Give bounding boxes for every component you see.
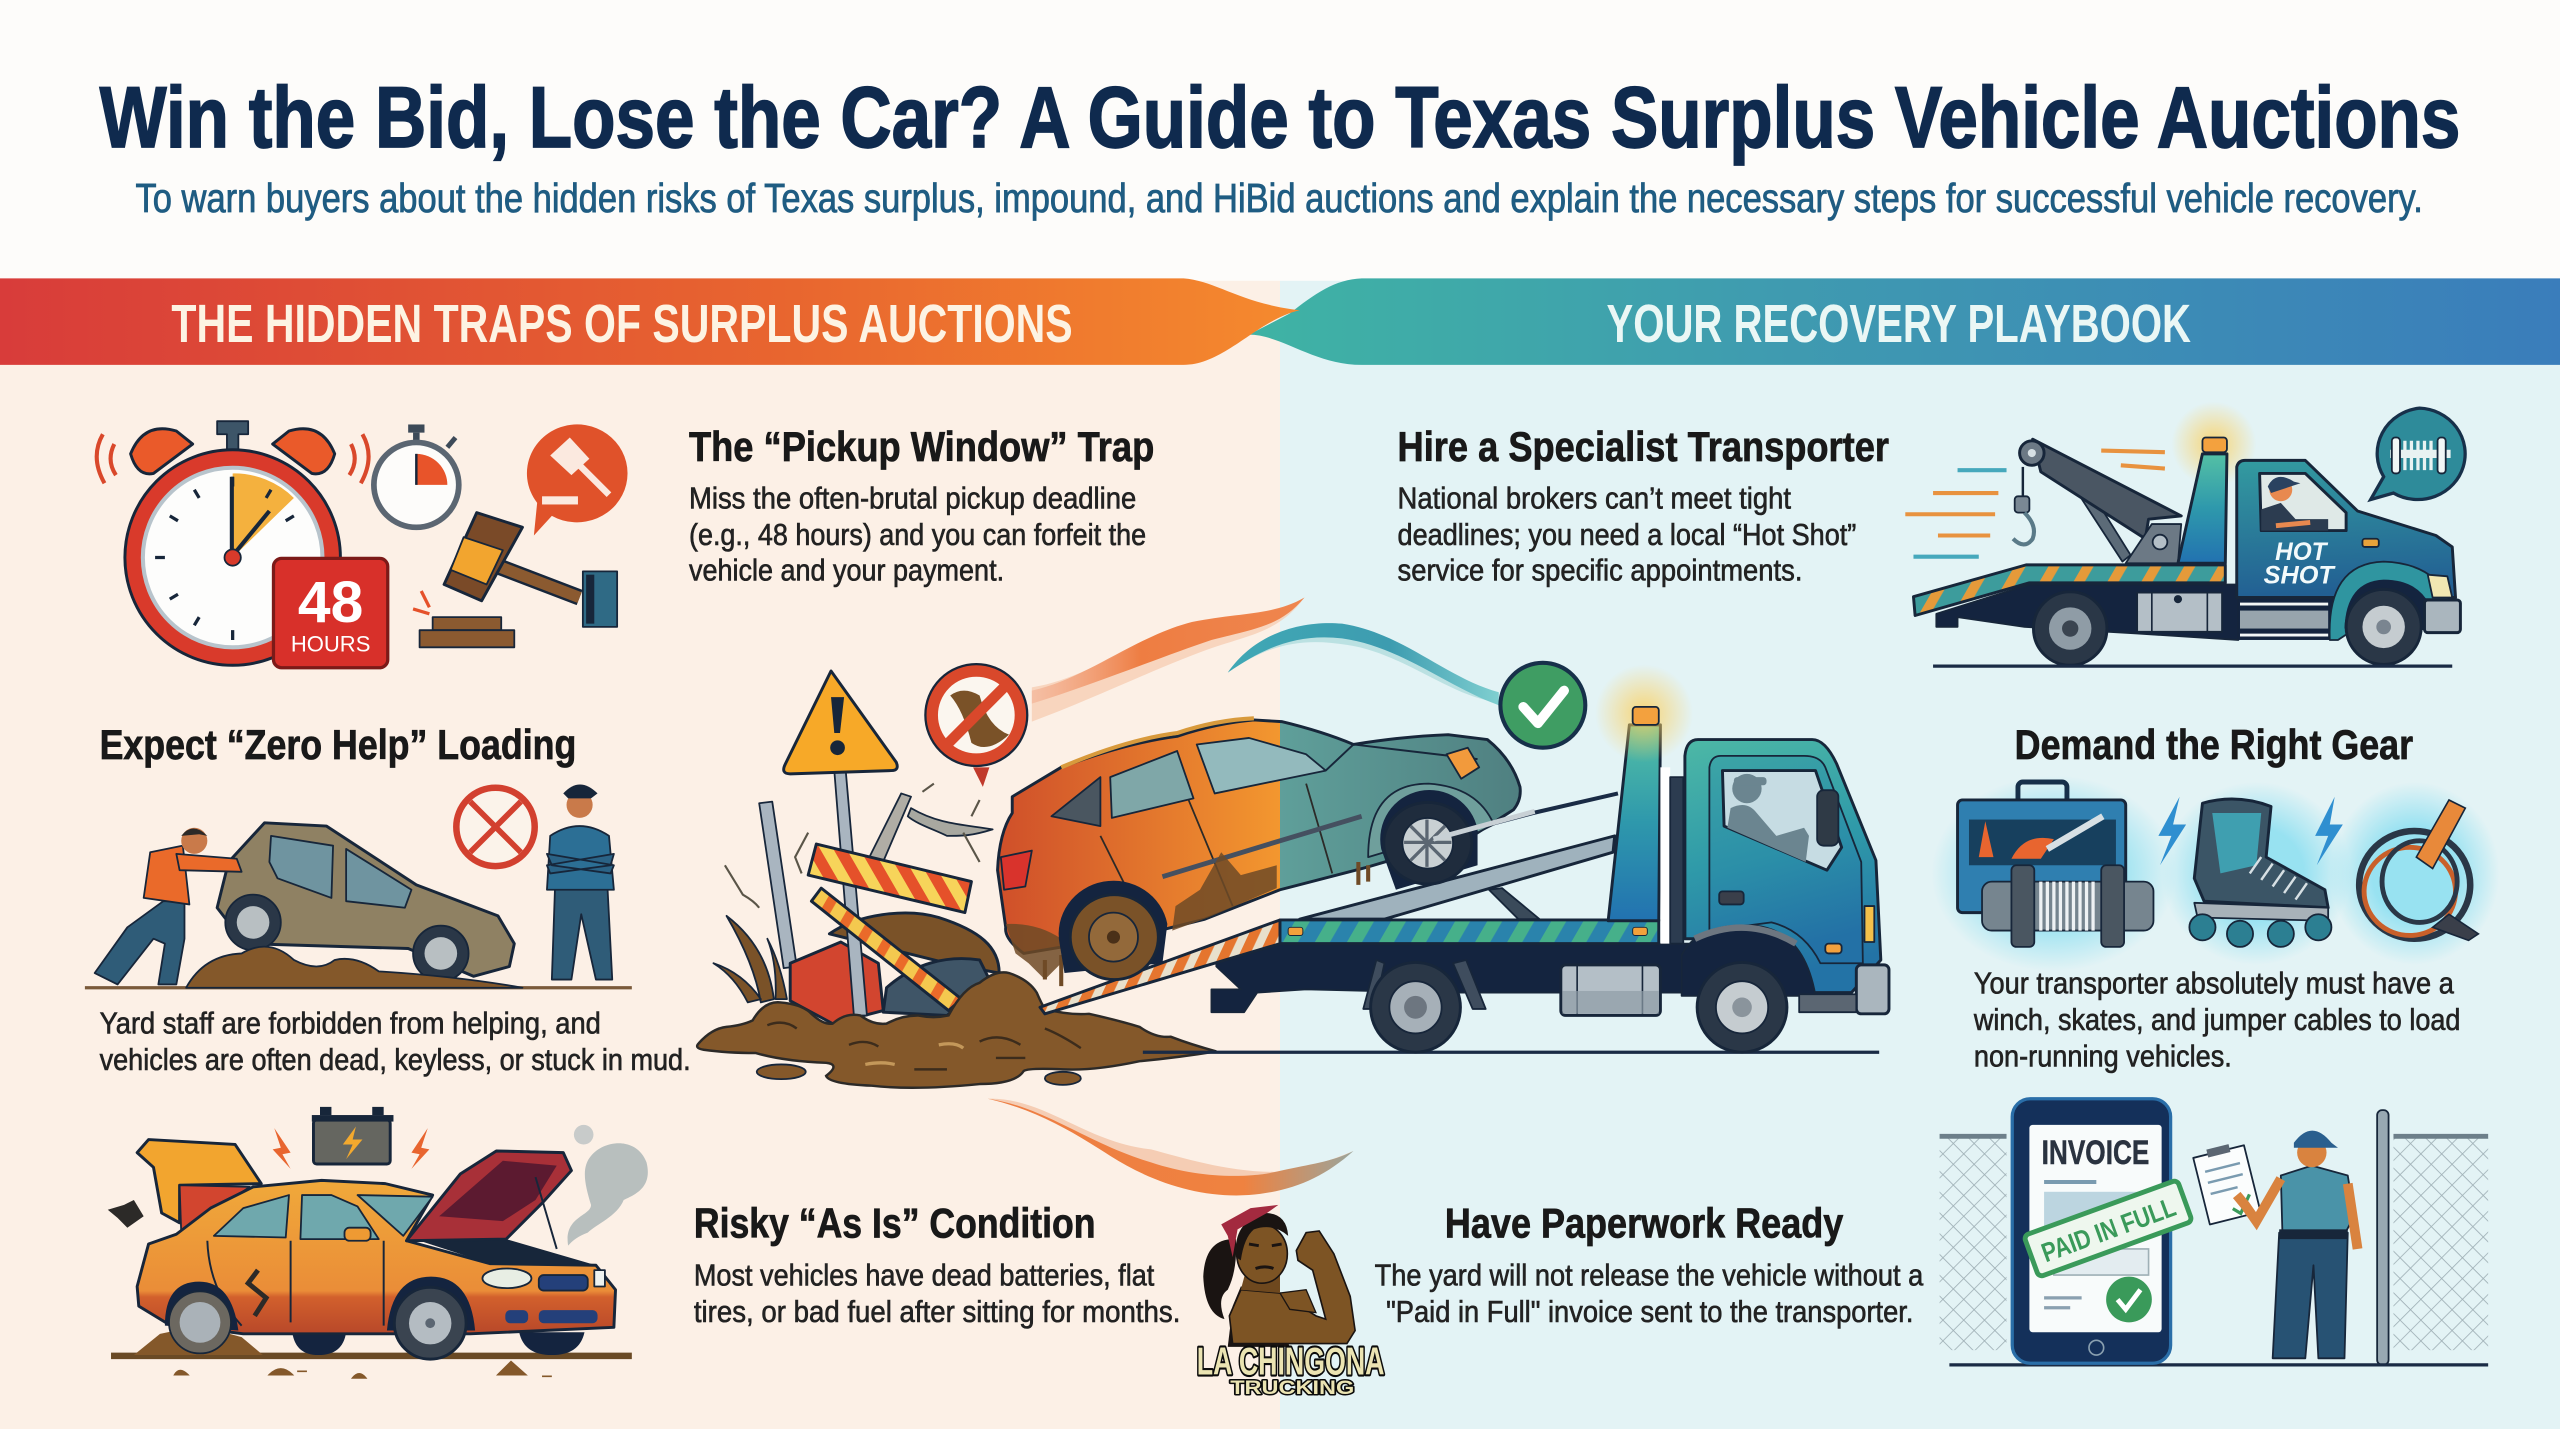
rear truck wheel: [1371, 962, 1460, 1052]
driver: [2261, 477, 2328, 531]
driver: [1727, 774, 1809, 862]
clock face: [143, 468, 322, 647]
rear wheel arch: [1059, 881, 1167, 973]
gavel speech bubble: [527, 424, 628, 535]
fenders: [1363, 960, 1486, 1009]
front fender: [1368, 784, 1494, 857]
car body: [137, 1180, 616, 1334]
text block: as is: [694, 1199, 1180, 1329]
ground: [111, 1354, 632, 1358]
sparks: [273, 1128, 429, 1169]
front truck wheel: [1697, 962, 1787, 1052]
sound arcs: [97, 434, 369, 483]
swoosh arrow: orange upper: [1032, 598, 1304, 722]
dirt rocks: [175, 1362, 552, 1378]
text block: as is: tires, or bad fuel after sitting for months.: [694, 1296, 1180, 1329]
skate: [2189, 799, 2331, 947]
deck: [1913, 565, 2225, 615]
dead branch: [725, 784, 993, 908]
headlight: [1447, 748, 1479, 779]
bumper: [1799, 965, 1889, 1014]
illustration: invoice and yard gate: [1940, 1099, 2488, 1365]
text block: specialist transporter: [1398, 423, 1889, 588]
taillight: [1001, 851, 1032, 890]
hood open: [407, 1151, 571, 1241]
banner: recovery playbook: [1249, 278, 2560, 365]
support arm: [1489, 888, 1540, 919]
tow hook: [1433, 811, 1535, 839]
wordmark: [1197, 1341, 1384, 1399]
door seams: [1100, 784, 1332, 931]
text block: specialist transporter: National brokers can’t meet tight: [1398, 483, 1792, 516]
speed lines: [1905, 451, 2165, 557]
window: [2260, 473, 2346, 531]
roof edge: [1061, 718, 1254, 767]
icon group: alarm clock 48 hours: [97, 421, 628, 668]
headlight and grille: [482, 1269, 605, 1323]
neck and head: [1241, 1265, 1280, 1293]
door panel: [1709, 756, 1863, 963]
hand on bicep: [1280, 1290, 1316, 1313]
toolbox: [1958, 782, 2126, 913]
paid in full stamp: PAID IN FULL: [2037, 1192, 2180, 1268]
mud stones: [757, 1064, 1081, 1085]
text block: specialist transporter: service for specific appointments.: [1398, 555, 1802, 588]
fuel tank: [1561, 965, 1660, 1015]
smoke: [568, 1143, 648, 1246]
ground: [85, 987, 632, 989]
front wheel arch: [1380, 790, 1478, 890]
side trim: [1162, 816, 1362, 877]
text block: right gear: Demand the Right Gear: [2015, 721, 2413, 768]
text block: as is: Risky “As Is” Condition: [694, 1199, 1096, 1246]
text block: paperwork: The yard will not release the vehicle without a: [1375, 1259, 1923, 1292]
hood prop: [536, 1177, 557, 1249]
text block: pickup window: The “Pickup Window” Trap: [689, 423, 1154, 470]
hair: [1236, 1213, 1288, 1260]
pushing man: [95, 828, 242, 984]
hood fold: [1326, 744, 1478, 771]
cab: [2237, 460, 2456, 598]
48 hours badge: 48: [298, 570, 363, 635]
mud splashes: [1006, 852, 1277, 980]
text block: paperwork: Have Paperwork Ready: [1445, 1199, 1843, 1246]
swoosh arrow: lower: [988, 1099, 1353, 1195]
window: [1722, 771, 1842, 870]
hero: wrecked items in mud: [697, 664, 1216, 1088]
mirror: [1817, 790, 1838, 846]
winch: [1982, 865, 2153, 947]
wordmark: LA CHINGONA: [1197, 1341, 1384, 1384]
trunk inner: [180, 1185, 250, 1233]
banner: hidden traps: THE HIDDEN TRAPS OF SURPLUS AUCTIONS: [171, 294, 1073, 354]
mud mound: [186, 947, 522, 988]
white gap and mast: [1660, 767, 1683, 944]
gate post: [2377, 1110, 2389, 1365]
ground: [1933, 665, 2452, 667]
phone: [2012, 1099, 2171, 1363]
impact marks: [413, 591, 429, 614]
debris: [108, 1200, 144, 1228]
warning sign: [784, 671, 897, 1015]
rear quarter window: [1051, 777, 1100, 826]
time wedge: [233, 473, 294, 558]
wheel arches: [165, 1277, 475, 1331]
stuck car: [217, 823, 514, 976]
far side wheels: [292, 1332, 584, 1355]
glow: [1931, 775, 2500, 971]
as-is car wheels: [169, 1287, 466, 1359]
beacon: [2171, 402, 2256, 487]
crack: [248, 1270, 266, 1316]
text block: zero help: Expect “Zero Help” Loading: [100, 721, 576, 768]
text block: right gear: Your transporter absolutely must have a: [1974, 967, 2454, 1000]
tire: [883, 959, 989, 1015]
sign pole left: [759, 802, 797, 968]
front window: [1197, 738, 1326, 793]
engine bay: [415, 1239, 596, 1265]
illustration: hot shot tow truck: [1905, 402, 2465, 666]
text block: right gear: winch, skates, and jumper cables to load: [1973, 1004, 2460, 1037]
grass: [713, 916, 787, 1002]
banner: hidden traps: [0, 278, 1300, 365]
swoosh arrow: teal upper: [1228, 623, 1499, 705]
hero: flatbed tow truck: [1040, 664, 1889, 1052]
gavel base: [420, 617, 514, 647]
boom: [2013, 439, 2181, 563]
text block: pickup window: Miss the often-brutal pickup deadline: [689, 483, 1136, 516]
face features: [1249, 1244, 1282, 1269]
yard worker: [2237, 1131, 2358, 1358]
gavel head: [444, 513, 580, 601]
cab: [1685, 740, 1881, 993]
trunk lid: [137, 1140, 261, 1223]
icons: winch, skates, jumper cables: [1931, 775, 2500, 971]
text block: paperwork: "Paid in Full" invoice sent to the transporter.: [1386, 1296, 1913, 1329]
text block: zero help: Yard staff are forbidden from helping, and: [100, 1007, 601, 1040]
hot shot label: HOT: [2275, 538, 2329, 566]
bumper and headlamp: [2424, 575, 2460, 633]
banner: recovery playbook: YOUR RECOVERY PLAYBOOK: [1607, 294, 2191, 354]
text block: zero help: vehicles are often dead, keyless, or stuck in mud.: [100, 1044, 691, 1077]
wheel arch: [1682, 925, 1816, 996]
front clean wheel: [1384, 802, 1472, 884]
frame: [1936, 584, 2238, 640]
clock top knob: [217, 421, 248, 454]
front fender: [2330, 562, 2449, 640]
text block: specialist transporter: Hire a Specialist Transporter: [1398, 423, 1889, 470]
text block: pickup window: vehicle and your payment.: [689, 555, 1004, 588]
navy frame: [1211, 944, 1690, 1012]
barricade upper: [808, 844, 971, 913]
no mud sign: [926, 664, 1027, 787]
mud pile: [697, 972, 1216, 1088]
arm and shoulder: [1229, 1231, 1355, 1344]
ticks: [155, 477, 294, 640]
text block: paperwork: [1375, 1199, 1923, 1329]
text block: as is: Most vehicles have dead batteries, flat: [694, 1259, 1155, 1292]
text block: zero help: [100, 721, 691, 1077]
hands: [232, 477, 269, 557]
mud mound: [134, 1326, 263, 1355]
door lines: [207, 1241, 384, 1326]
hot shot label: [2264, 538, 2336, 590]
fences: [1940, 1136, 2488, 1350]
headboard: [1608, 725, 1660, 921]
hero: car half muddy half clean: [998, 718, 1535, 986]
officer: [547, 784, 614, 980]
tilted deck: [1300, 836, 1615, 919]
bed markers: [1288, 927, 1647, 935]
rock: [829, 913, 999, 973]
bells: [131, 429, 335, 474]
text block: pickup window: (e.g., 48 hours) and you can forfeit the: [689, 519, 1146, 552]
phone: INVOICE: [2042, 1134, 2149, 1172]
check badge: [1500, 663, 1585, 748]
cab lights: [1825, 906, 1874, 953]
beacon: [1595, 664, 1693, 762]
barricade lower: [811, 888, 962, 1011]
middle window: [1110, 751, 1193, 818]
text block: right gear: [1973, 721, 2460, 1074]
ramp: [1040, 920, 1280, 1014]
jumper cables: [2359, 800, 2478, 940]
clipboard: [2192, 1141, 2261, 1224]
tow line: [1433, 793, 1618, 839]
rocker steps: [2238, 598, 2333, 640]
lightning bolts: [2158, 797, 2343, 865]
gavel cuff: [583, 571, 617, 627]
truck ground line: [1143, 1051, 1879, 1053]
illustration: damaged as-is car: [108, 1107, 648, 1378]
stuck car wheels: [225, 895, 469, 981]
48 hours badge: HOURS: [291, 631, 370, 656]
text block: right gear: non-running vehicles.: [1974, 1041, 2232, 1074]
headboard: [2178, 454, 2227, 563]
ponytail: [1203, 1239, 1236, 1319]
car windows: [214, 1195, 433, 1239]
bandana: [1221, 1205, 1278, 1257]
48 hours badge: [273, 558, 388, 668]
clock body: [125, 450, 340, 665]
ground: [1949, 1364, 2488, 1366]
logo: La Chingona Trucking: [1197, 1205, 1384, 1399]
tank top: [1228, 1286, 1290, 1347]
red box: [790, 942, 883, 1024]
winch speech bubble: [2371, 408, 2465, 500]
hood light: [2362, 539, 2379, 547]
text block: pickup window: [689, 423, 1154, 588]
mirror: [344, 1228, 371, 1241]
rear muddy wheel: [1070, 895, 1158, 980]
wordmark: TRUCKING: [1230, 1377, 1354, 1399]
door handle: [1719, 891, 1744, 904]
car windows: [269, 836, 411, 908]
bed strip: [1280, 920, 1659, 944]
fuel tank: [2137, 593, 2222, 632]
illustration: car stuck in mud with officer: [85, 784, 632, 988]
text block: specialist transporter: deadlines; you need a local “Hot Shot”: [1398, 519, 1856, 552]
no sign: [456, 788, 535, 866]
stopwatch: [374, 424, 459, 527]
wheels: [2033, 589, 2421, 665]
battery: [312, 1107, 393, 1164]
hot shot label: SHOT: [2264, 562, 2336, 590]
